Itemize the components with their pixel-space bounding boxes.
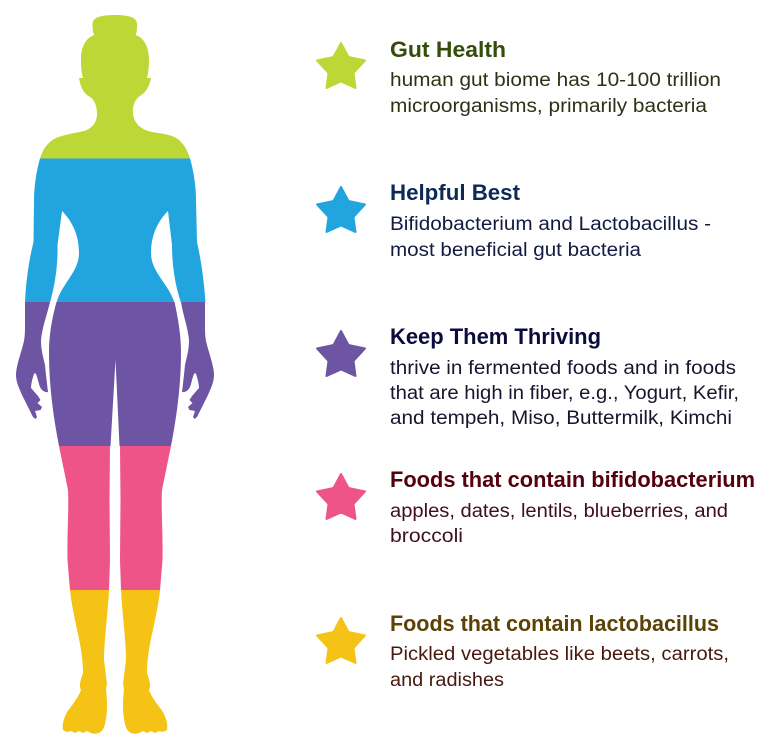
icon: blue star (317, 187, 365, 232)
body section: head and shoulders (green) (40, 15, 190, 158)
heading: Foods that contain lactobacillus: Foods that contain lactobacillus (390, 611, 719, 636)
text: beneficial bacteria description: most beneficial gut bacteria (390, 240, 641, 261)
body section: lower thighs and knees (pink) (59, 446, 171, 590)
icon: purple star (317, 331, 365, 376)
text: fermented foods description: that are high in fiber, e.g., Yogurt, Kefir, (390, 383, 739, 404)
text: bifidobacterium foods list (390, 501, 728, 547)
body section: hips, thighs and hands (purple) (16, 302, 214, 446)
text: gut biome description: microorganisms, primarily bacteria (390, 96, 707, 117)
text: lactobacillus foods list: and radishes (390, 670, 504, 691)
item: Foods that contain lactobacillus (317, 611, 729, 691)
icon: pink star (317, 474, 365, 519)
item: Foods that contain bifidobacterium (317, 467, 755, 547)
icon: green star (317, 43, 365, 88)
text: fermented foods description (390, 358, 739, 429)
heading: Keep Them Thriving: Keep Them Thriving (390, 324, 601, 349)
text: bifidobacterium foods list: apples, dates, lentils, blueberries, and (390, 501, 728, 522)
text: gut biome description: human gut biome has 10-100 trillion (390, 70, 721, 91)
item: Gut Health (317, 37, 721, 117)
heading: Helpful Best: Helpful Best (390, 180, 521, 205)
text: beneficial bacteria description (390, 214, 711, 261)
item: Keep Them Thriving (317, 324, 739, 429)
text: lactobacillus foods list: Pickled vegetables like beets, carrots, (390, 644, 729, 665)
item: Helpful Best (317, 180, 711, 261)
heading: Gut Health: Gut Health (390, 37, 506, 62)
text: fermented foods description: and tempeh, Miso, Buttermilk, Kimchi (390, 408, 732, 429)
text: gut biome description (390, 70, 721, 117)
human body figure (16, 15, 214, 734)
icon: yellow star (317, 618, 365, 663)
heading: Foods that contain bifidobacterium: Foods that contain bifidobacterium (390, 467, 755, 492)
text: lactobacillus foods list (390, 644, 729, 691)
body section: chest and upper arms (blue) (25, 158, 206, 302)
text: beneficial bacteria description: Bifidobacterium and Lactobacillus - (390, 214, 711, 235)
body section: calves and feet (yellow) (63, 590, 167, 734)
text: bifidobacterium foods list: broccoli (390, 526, 463, 547)
text: fermented foods description: thrive in fermented foods and in foods (390, 358, 736, 379)
